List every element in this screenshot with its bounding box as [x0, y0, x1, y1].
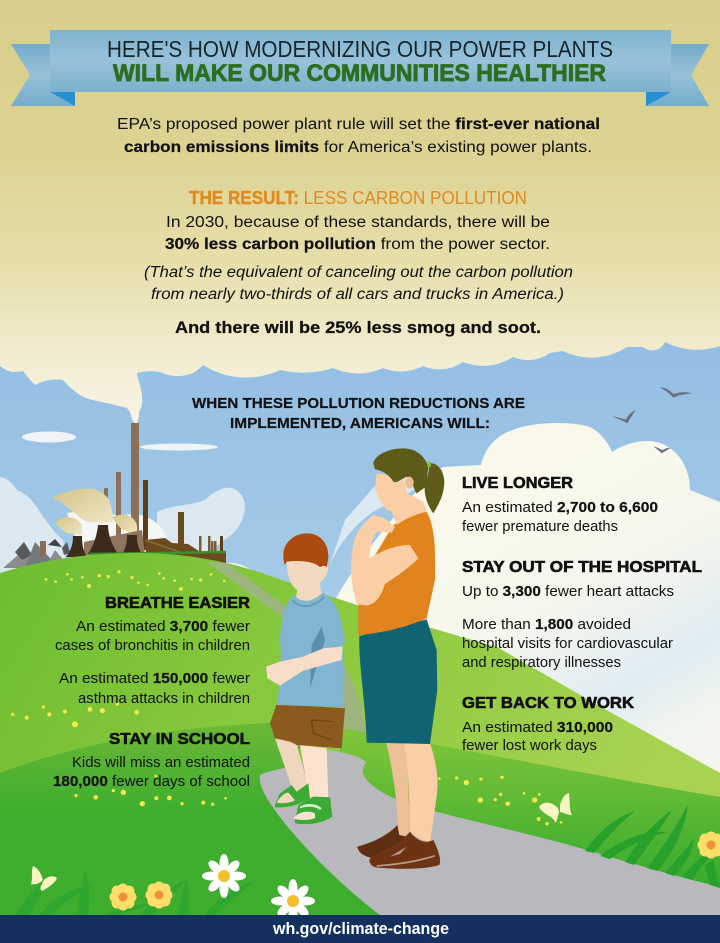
cooling towers	[66, 536, 87, 557]
smog and soot statement: And there will be 25% less smog and soot.	[175, 318, 541, 337]
flower: white daisy 1	[202, 854, 246, 898]
benefit: live longer	[462, 475, 658, 535]
birds	[612, 388, 692, 453]
live longer heading: LIVE LONGER	[462, 475, 573, 492]
boy sandals	[275, 783, 332, 824]
ribbon band	[50, 30, 671, 92]
hospital heading: STAY OUT OF THE HOSPITAL	[462, 559, 702, 576]
butterfly right	[539, 793, 572, 823]
heading line one: WHEN THESE POLLUTION REDUCTIONS ARE	[192, 395, 525, 412]
intro line two: carbon emissions limits for America’s existing power plants.	[124, 139, 592, 156]
equivalent note	[144, 264, 573, 303]
butterfly left	[31, 866, 57, 891]
note line two: from nearly two-thirds of all cars and trucks in America.)	[151, 286, 564, 303]
mother legs	[385, 738, 410, 836]
large cloud on the right	[330, 423, 720, 800]
hospital visits line one: More than 1,800 avoided	[462, 617, 631, 633]
background: cream sky	[0, 0, 720, 425]
background: blue sky	[0, 342, 720, 800]
title line one: HERE'S HOW MODERNIZING OUR POWER PLANTS	[107, 36, 613, 62]
boy head	[287, 560, 328, 601]
deaths line two: fewer premature deaths	[462, 519, 618, 535]
boy legs	[275, 738, 308, 795]
mother ponytail	[425, 463, 444, 513]
hospital visits line three: and respiratory illnesses	[462, 655, 621, 671]
asthma line two: asthma attacks in children	[78, 691, 250, 707]
back green hill	[0, 553, 720, 900]
mother ear	[405, 477, 414, 489]
note line one: (That’s the equivalent of canceling out the carbon pollution	[144, 264, 573, 281]
boy shorts	[270, 704, 345, 748]
distant faded path	[207, 562, 365, 735]
boy shirt	[277, 593, 345, 707]
result text	[165, 214, 550, 253]
school line one: Kids will miss an estimated	[72, 755, 250, 771]
result line one: In 2030, because of these standards, there will be	[166, 214, 550, 231]
asthma line one: An estimated 150,000 fewer	[59, 671, 250, 687]
result heading: THE RESULT: LESS CARBON POLLUTION	[189, 187, 527, 208]
plant base	[140, 552, 226, 564]
flower: yellow 2	[146, 882, 172, 908]
benefit: get back to work	[462, 695, 634, 754]
benefit: stay in school	[53, 731, 250, 790]
result line two: 30% less carbon pollution from the power sector.	[165, 236, 550, 253]
boy arm	[266, 647, 343, 686]
mother	[351, 448, 444, 869]
boy	[266, 533, 345, 824]
boy hair	[283, 533, 328, 567]
benefit: stay out of the hospital	[462, 559, 702, 671]
benefit: breathe easier	[55, 595, 250, 707]
yellow dots on right hill	[438, 776, 562, 825]
mother shoes	[357, 825, 440, 869]
footer url: wh.gov/climate-change	[272, 919, 449, 938]
intro line one: EPA’s proposed power plant rule will set the first-ever national	[117, 116, 600, 133]
mother hair	[373, 448, 428, 493]
stay in school heading: STAY IN SCHOOL	[109, 731, 250, 748]
yellow dots on upper hill	[11, 570, 227, 806]
footer bar	[0, 915, 720, 943]
bronchitis line one: An estimated 3,700 fewer	[76, 619, 250, 635]
flower: white daisy 2	[271, 879, 315, 923]
steam	[52, 489, 113, 522]
factory buildings	[84, 530, 145, 555]
work heading: GET BACK TO WORK	[462, 695, 634, 712]
right ribbon tail	[646, 44, 709, 106]
breathe easier heading: BREATHE EASIER	[105, 595, 250, 612]
mother arm	[351, 515, 418, 606]
intro text	[117, 116, 600, 156]
deaths line one: An estimated 2,700 to 6,600	[462, 500, 658, 516]
front left hill	[0, 723, 400, 915]
grass on the left	[15, 868, 255, 915]
pale clouds on the left	[0, 432, 252, 580]
title banner	[11, 30, 709, 106]
mother skirt	[359, 619, 437, 744]
left ribbon tail	[11, 44, 75, 106]
work line one: An estimated 310,000	[462, 720, 613, 736]
grass on the right	[585, 804, 720, 888]
left ribbon fold	[50, 92, 75, 106]
smoke stacks	[131, 423, 139, 545]
heading line two: IMPLEMENTED, AMERICANS WILL:	[230, 415, 490, 432]
flower: yellow right	[698, 832, 720, 858]
grey walking path	[260, 750, 720, 915]
section heading	[192, 395, 525, 432]
mountains	[3, 539, 70, 568]
heart attacks line: Up to 3,300 fewer heart attacks	[462, 584, 674, 600]
work line two: fewer lost work days	[462, 738, 597, 754]
flower: yellow 1	[110, 884, 136, 910]
right ribbon fold	[646, 92, 671, 106]
pale cloud behind the mother	[328, 465, 445, 570]
bronchitis line two: cases of bronchitis in children	[55, 638, 250, 654]
front right hill	[340, 728, 720, 900]
power plant	[3, 423, 226, 568]
title line two: WILL MAKE OUR COMMUNITIES HEALTHIER	[113, 60, 606, 87]
hospital visits line two: hospital visits for cardiovascular	[462, 636, 673, 652]
mother head and neck	[375, 473, 427, 525]
mother shirt	[358, 512, 435, 635]
school line two: 180,000 fewer days of school	[53, 774, 250, 790]
